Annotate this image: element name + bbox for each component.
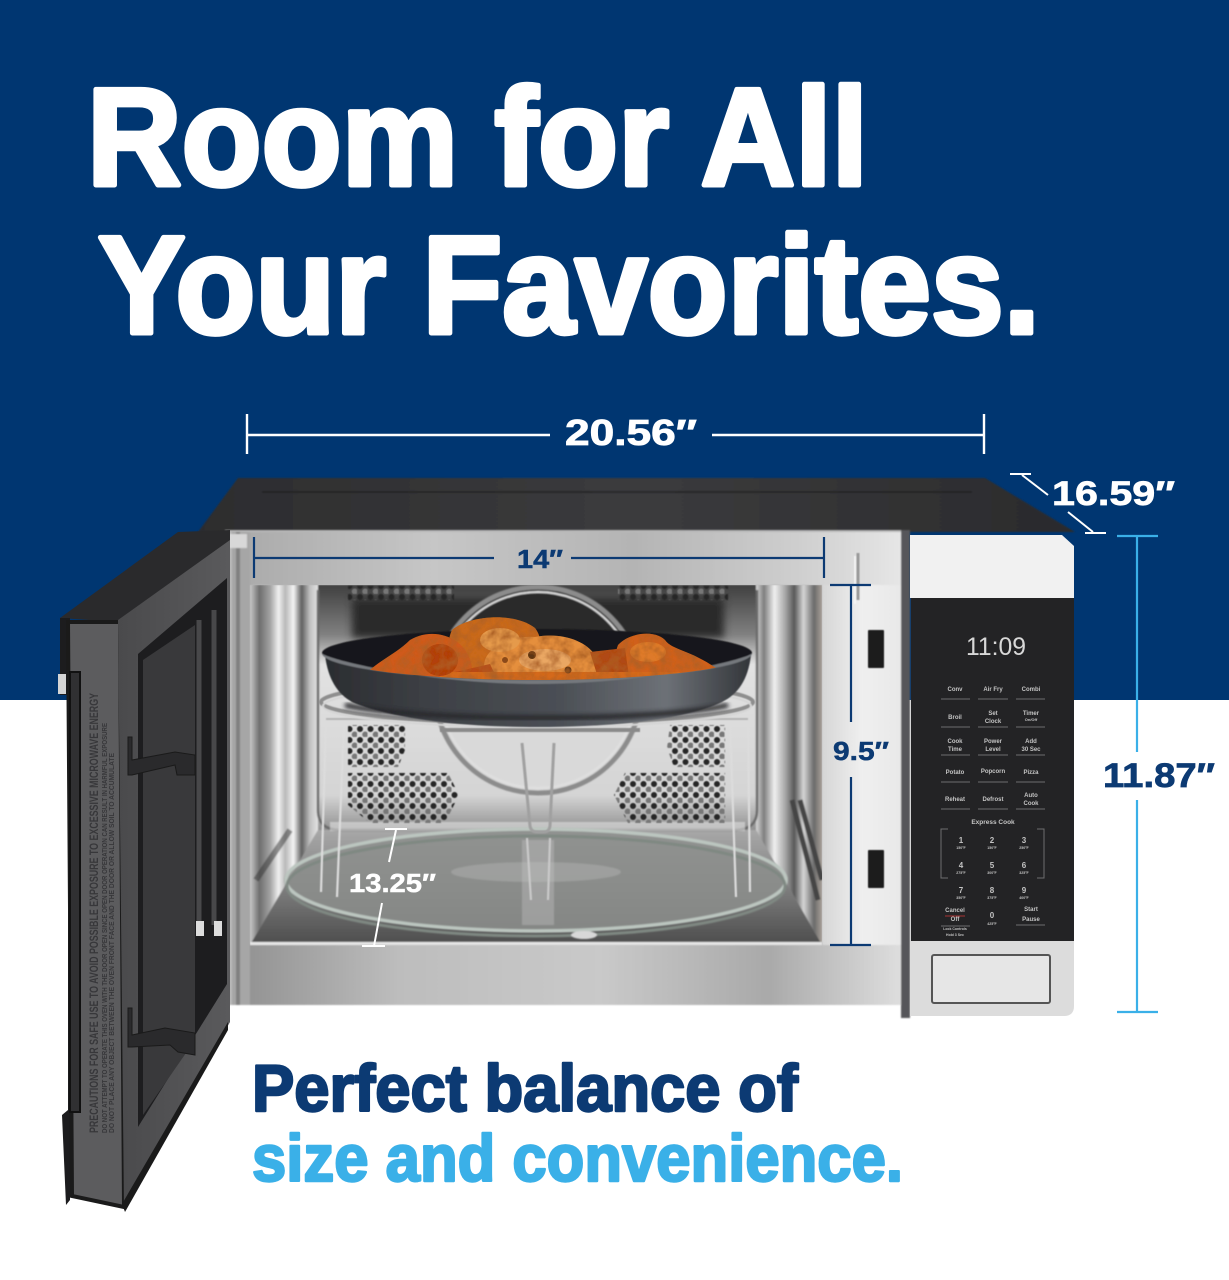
door seal strip [70,672,80,1112]
keypad: 350°F [956,896,967,900]
wire rack legs [321,719,750,900]
microwave body [225,530,1074,1018]
tagline [252,1051,903,1195]
dimension: cavity width 14 inches: 14″ [517,544,563,574]
control panel [910,535,1074,1016]
dimension: turntable diameter 13.25 inches: 13.25″ [349,868,436,898]
door warning text: DO NOT PLACE ANY OBJECT BETWEEN THE OVEN FRONT FACE AND THE DOOR OR ALLOW SOIL TO ACCUMULATE [109,753,116,1133]
keypad: Cancel [945,908,965,914]
keypad: Off [951,917,960,923]
keypad: 3 [1022,836,1027,845]
keypad: 0 [990,911,995,920]
keypad: 8 [990,886,995,895]
tagline: size and convenience. [252,1121,903,1195]
title: Room for All [87,60,868,215]
dimension: cavity width 14 inches [254,537,824,578]
keypad: Hold 3 Sec [946,933,964,937]
keypad: 4 [959,861,964,870]
keypad: 325°F [1019,871,1030,875]
keypad: 275°F [956,871,967,875]
keypad: Broil [948,715,962,721]
keypad: Cook [948,739,963,745]
keypad: 150°F [956,846,967,850]
keypad: 400°F [1019,896,1030,900]
keypad: Set [988,711,998,717]
air fry pan [322,629,752,727]
door warning text [87,693,116,1133]
dimension: cavity height 9.5 inches: 9.5″ [833,736,889,766]
keypad: Defrost [982,797,1004,803]
panel black face [911,598,1074,941]
door latch slots [855,553,884,888]
digital clock: 11:09 [966,633,1026,661]
vent holes [348,586,728,823]
keypad: Time [948,747,963,753]
panel bottom stainless trim [910,941,1074,1016]
keypad: Timer [1023,711,1040,717]
door spine edge [60,618,70,1205]
door top edge [60,530,230,622]
door window [138,578,227,1127]
keypad: Pause [1022,917,1040,923]
heating element ring [434,586,642,794]
key underlines and bracket [941,699,1045,926]
keypad: Potato [946,770,965,776]
dimension: overall width 20.56 inches: 20.56″ [565,412,697,453]
door warning text: PRECAUTIONS FOR SAFE USE TO AVOID POSSIBLE EXPOSURE TO EXCESSIVE MICROWAVE ENERGY [87,693,101,1133]
door bottom lip [122,1022,228,1212]
fried chicken [370,617,716,680]
keypad: Air Fry [983,687,1003,693]
door latch hooks [128,737,195,1055]
stainless front frame [225,530,910,1018]
dimension: overall height 11.87 inches [1103,536,1215,1012]
keypad: Add [1025,739,1037,745]
title [87,60,1040,363]
keypad: 150°F [987,846,998,850]
keypad: Express Cook [971,819,1015,826]
dimension: cavity height 9.5 inches [830,585,889,945]
keypad: Popcorn [981,769,1005,775]
door warning text: DO NOT ATTEMPT TO OPERATE THIS OVEN WITH THE DOOR OPEN SINCE OPEN DOOR OPERATION CAN RESULT IN HARMFUL EXPOSURE [102,723,109,1133]
keypad: 1 [959,836,964,845]
oven cavity [250,585,822,946]
keypad: 9 [1022,886,1027,895]
keypad: On/Off [1025,717,1038,722]
keypad: 7 [959,886,964,895]
keypad [943,687,1041,937]
microwave top panel [198,478,1075,532]
keypad: Power [984,739,1003,745]
keypad: 6 [1022,861,1027,870]
background: navy upper band [0,0,1229,700]
cavity walls and floor [250,585,822,945]
glass turntable [284,828,788,939]
keypad: 425°F [987,922,998,926]
dimension: depth 16.59 inches: 16.59″ [1052,475,1175,513]
keypad: Clock [985,719,1002,725]
keypad: Auto [1024,793,1038,799]
keypad: Start [1024,907,1038,913]
keypad: Lock Controls [943,927,967,931]
open door [58,530,230,1212]
dimension: overall width 20.56 inches [247,412,984,454]
dimension: depth 16.59 inches [1010,474,1175,533]
keypad: Conv [948,687,963,693]
tagline: Perfect balance of [252,1051,799,1125]
keypad: 5 [990,861,995,870]
door hinge tab [58,674,66,694]
wire rack ring [319,691,756,728]
keypad: Reheat [945,797,965,803]
keypad: Level [985,747,1001,753]
door inner frame [118,540,230,1210]
dimension: overall height 11.87 inches: 11.87″ [1103,757,1215,795]
title: Your Favorites. [98,208,1040,363]
door inner grey seal [68,622,124,1207]
door release button [932,955,1050,1003]
keypad: Cook [1024,801,1039,807]
keypad: 250°F [1019,846,1030,850]
keypad: 375°F [987,896,998,900]
keypad: 2 [990,836,995,845]
dimension: turntable diameter 13.25 inches [349,829,436,946]
keypad: 30 Sec [1021,747,1041,753]
panel top stainless trim [910,535,1074,598]
keypad: Combi [1022,687,1041,693]
keypad: 300°F [987,871,998,875]
keypad: Pizza [1023,770,1039,776]
